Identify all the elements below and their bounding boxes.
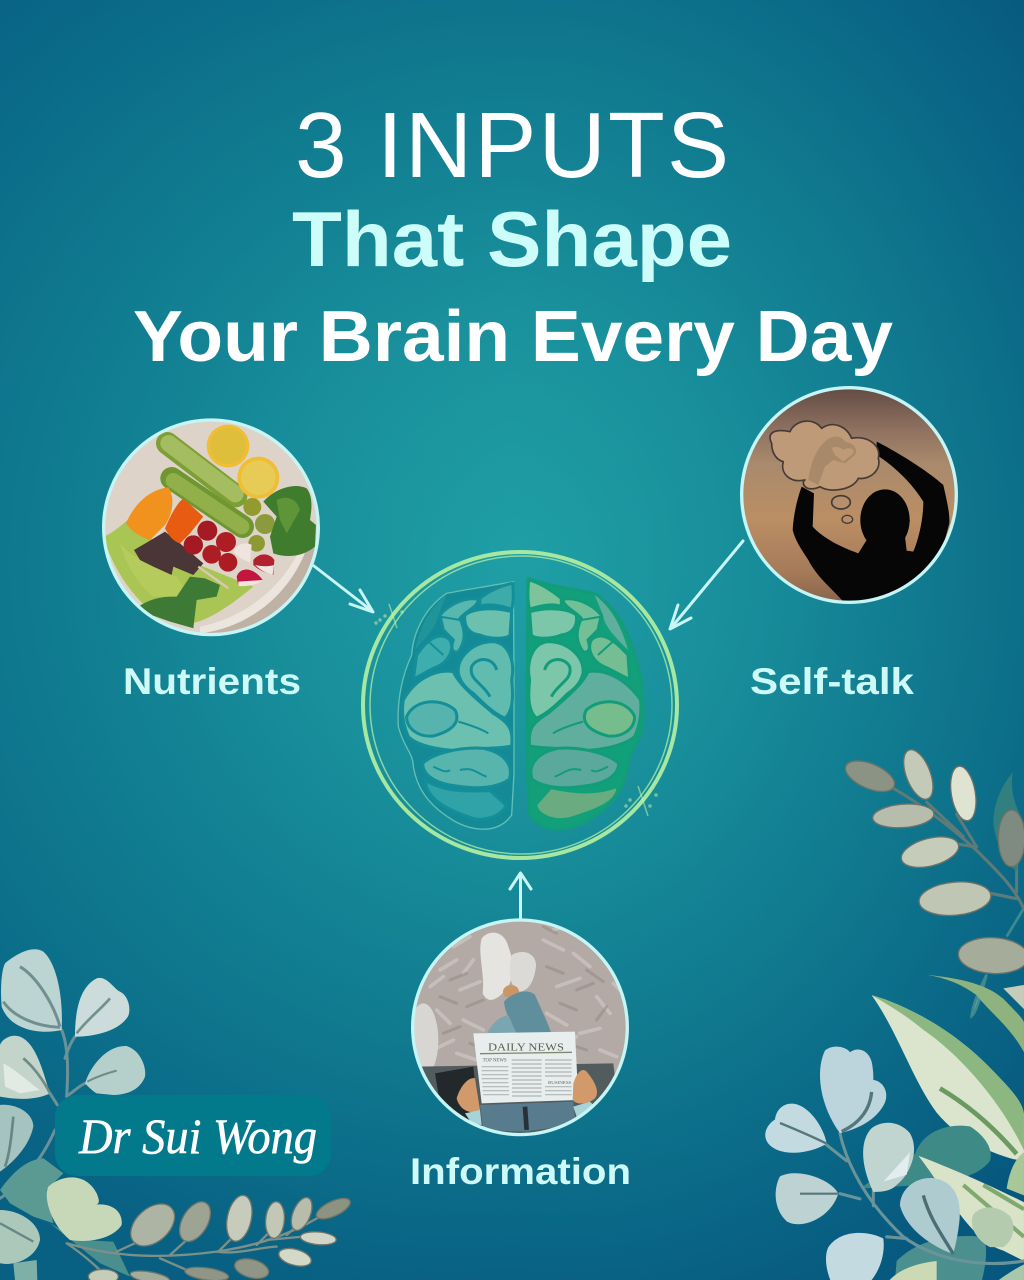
cucumber two bbox=[172, 478, 243, 527]
newspaper photo frame bbox=[413, 920, 627, 1135]
title line: That Shape: That Shape bbox=[292, 195, 732, 283]
kale right bbox=[263, 486, 316, 556]
title line: 3 INPUTS: 3 INPUTS bbox=[295, 93, 729, 197]
right hand bbox=[573, 1070, 597, 1104]
leaf middle left bbox=[0, 1036, 50, 1099]
red pepper bbox=[165, 498, 203, 543]
silhouette head bbox=[860, 489, 910, 540]
blue leaf lower right bbox=[900, 1178, 960, 1254]
blue leaf bottom bbox=[826, 1233, 884, 1280]
jeans upper bbox=[504, 992, 552, 1034]
teal leaf lower bbox=[50, 1223, 130, 1277]
silhouette body bbox=[793, 442, 949, 610]
shoe right bbox=[510, 952, 536, 992]
orange pepper bbox=[126, 487, 172, 540]
badge background bbox=[55, 1095, 331, 1176]
signature text: Dr Sui Wong bbox=[78, 1108, 317, 1164]
pouf at left bbox=[414, 1003, 438, 1066]
pale leaf behind bbox=[1003, 985, 1024, 1009]
title bbox=[133, 93, 893, 377]
pale green leaf edge bbox=[1007, 1152, 1024, 1195]
photo: nutrients plate bbox=[100, 417, 323, 643]
left hemisphere bbox=[398, 582, 514, 829]
brain ring bbox=[363, 552, 677, 858]
large variegated leaf bbox=[872, 995, 1024, 1161]
blue leaf left lower bbox=[776, 1173, 838, 1224]
small thought bubbles bbox=[832, 496, 850, 509]
bottom sprig stem bbox=[67, 1217, 320, 1280]
carpet bbox=[416, 922, 626, 1074]
bottom sprig buds bbox=[88, 1193, 353, 1280]
teal leaf bbox=[0, 1158, 63, 1223]
green leaf bbox=[47, 1177, 122, 1241]
brain illustration bbox=[398, 578, 643, 829]
signature badge bbox=[55, 1095, 331, 1176]
jeans lower bbox=[480, 1102, 575, 1132]
photo: reading newspaper bbox=[408, 917, 630, 1143]
label: Self-talk: Self-talk bbox=[750, 661, 914, 702]
sunset backdrop bbox=[740, 387, 960, 607]
photo: self-talk silhouette bbox=[740, 387, 960, 610]
hands heart shape in cloud bbox=[808, 437, 856, 485]
plate frame bbox=[104, 420, 318, 635]
newspaper sub-head: TOP NEWS bbox=[483, 1058, 507, 1063]
leaf bottom left bbox=[0, 1210, 40, 1264]
thought cloud bbox=[770, 421, 879, 490]
sprig buds bbox=[841, 746, 1024, 975]
newspaper columns bbox=[482, 1060, 572, 1096]
lemon two bbox=[237, 457, 279, 499]
stems left bbox=[0, 1030, 85, 1198]
sofa bbox=[422, 1063, 615, 1133]
lemon one bbox=[207, 425, 249, 467]
label: Nutrients: Nutrients bbox=[123, 661, 301, 702]
leaf top large bbox=[1, 949, 62, 1032]
arrow: nutrients to brain bbox=[314, 566, 373, 612]
green bud bottom bbox=[878, 1261, 937, 1280]
ankle bbox=[503, 985, 519, 998]
teal stalk bbox=[972, 909, 1023, 1016]
leaf middle right bbox=[85, 1046, 145, 1095]
title line: Your Brain Every Day: Your Brain Every Day bbox=[133, 297, 893, 377]
sleeves bbox=[465, 1110, 482, 1125]
purple lettuce bbox=[134, 532, 203, 575]
leaf lower left bbox=[0, 1105, 33, 1172]
sparkle upper left bbox=[375, 604, 403, 628]
tomatoes bbox=[197, 521, 217, 541]
radishes bbox=[233, 543, 252, 563]
foliage bottom right bbox=[765, 746, 1024, 1280]
right hemisphere bbox=[527, 578, 643, 829]
green bud right bbox=[977, 1264, 1024, 1280]
teal upright leaf bbox=[993, 773, 1024, 871]
olives bbox=[243, 498, 261, 516]
lower variegated leaf bbox=[918, 1156, 1024, 1261]
label: Information: Information bbox=[410, 1151, 631, 1192]
bud in lower leaf bbox=[972, 1207, 1013, 1247]
blue leaf top bbox=[820, 1047, 886, 1133]
lettuce bbox=[103, 518, 253, 623]
foliage bottom left bbox=[0, 949, 353, 1280]
self-talk frame bbox=[742, 388, 956, 602]
kale bottom bbox=[138, 577, 220, 628]
blue sprig stems bbox=[825, 1133, 1024, 1263]
upper green leaf bbox=[927, 975, 1024, 1052]
newspaper business text: BUSINESS bbox=[548, 1080, 572, 1085]
arrow: self-talk to brain bbox=[670, 541, 743, 629]
leaf top right bbox=[75, 978, 129, 1037]
newspaper masthead: DAILY NEWS bbox=[488, 1041, 564, 1053]
sparkle lower right bbox=[625, 786, 657, 816]
newspaper bbox=[473, 1032, 578, 1103]
left hand bbox=[457, 1078, 480, 1112]
leaf stub bottom bbox=[13, 1260, 37, 1280]
dark teal leaf bbox=[860, 1126, 991, 1188]
sprig stems bbox=[893, 788, 1024, 909]
blue leaf centre bbox=[863, 1123, 914, 1192]
shoe left bbox=[480, 933, 513, 1000]
blue leaf left bbox=[765, 1104, 827, 1153]
arrow: information to brain bbox=[510, 873, 531, 918]
lower teal leaf bbox=[893, 1236, 986, 1280]
plate bbox=[105, 422, 317, 633]
cucumber one bbox=[167, 443, 236, 496]
